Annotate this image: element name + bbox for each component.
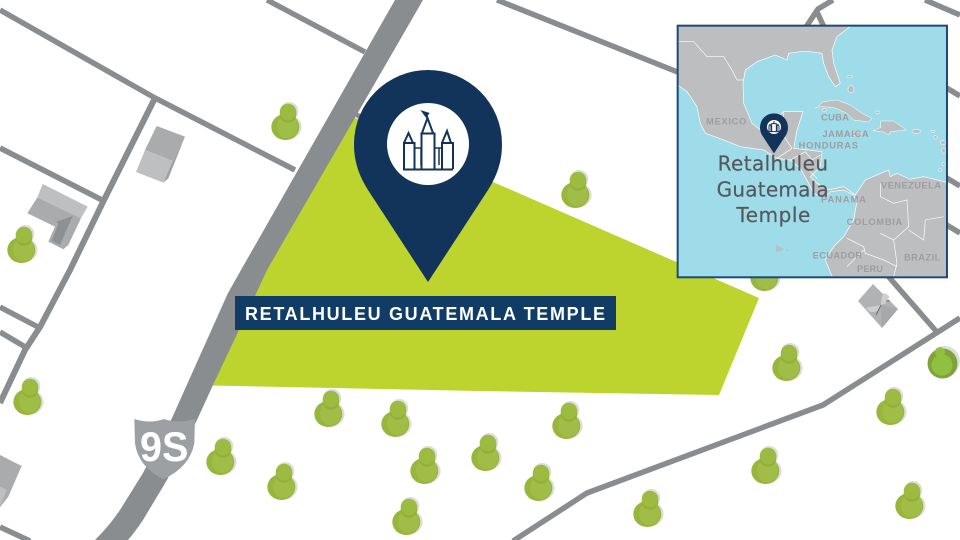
name label banner <box>235 296 616 330</box>
country labels: COLOMBIA <box>847 217 903 227</box>
country labels <box>706 112 941 274</box>
highway 9S <box>95 0 423 540</box>
ocean <box>678 26 947 277</box>
large map pin <box>354 70 502 282</box>
small map pin <box>760 113 788 153</box>
country labels: JAMAICA <box>822 129 869 139</box>
round tree <box>928 346 960 378</box>
inset locator map <box>675 25 950 280</box>
inset title: Retalhuleu <box>718 152 828 176</box>
country labels: ECUADOR <box>813 251 862 261</box>
Galapagos <box>776 244 784 253</box>
country labels: BRAZIL <box>904 252 941 262</box>
building: northwest rectangular roof <box>136 126 185 183</box>
building: southwest roof <box>0 455 22 507</box>
temple site parcel <box>210 118 759 395</box>
country labels: PERU <box>857 264 883 274</box>
trees <box>7 102 926 535</box>
building: west L-shaped roof <box>27 184 88 249</box>
country labels: CUBA <box>821 112 849 122</box>
inset frame <box>678 26 947 277</box>
icon: temple <box>403 112 453 170</box>
highway shield: 9S <box>140 423 188 470</box>
inset title: Temple <box>735 203 810 227</box>
name label banner: RETALHULEU GUATEMALA TEMPLE <box>245 304 605 324</box>
country labels: PANAMA <box>821 195 866 205</box>
country labels: HONDURAS <box>799 141 858 151</box>
building: east pyramid roof <box>858 284 898 328</box>
country labels: MEXICO <box>706 116 746 126</box>
islands <box>815 75 946 171</box>
country labels: VENEZUELA <box>881 181 941 191</box>
inset title <box>717 152 829 227</box>
country borders <box>679 42 944 277</box>
land masses <box>675 25 950 280</box>
inset title: Guatemala <box>717 178 829 202</box>
highway shield <box>134 419 195 479</box>
